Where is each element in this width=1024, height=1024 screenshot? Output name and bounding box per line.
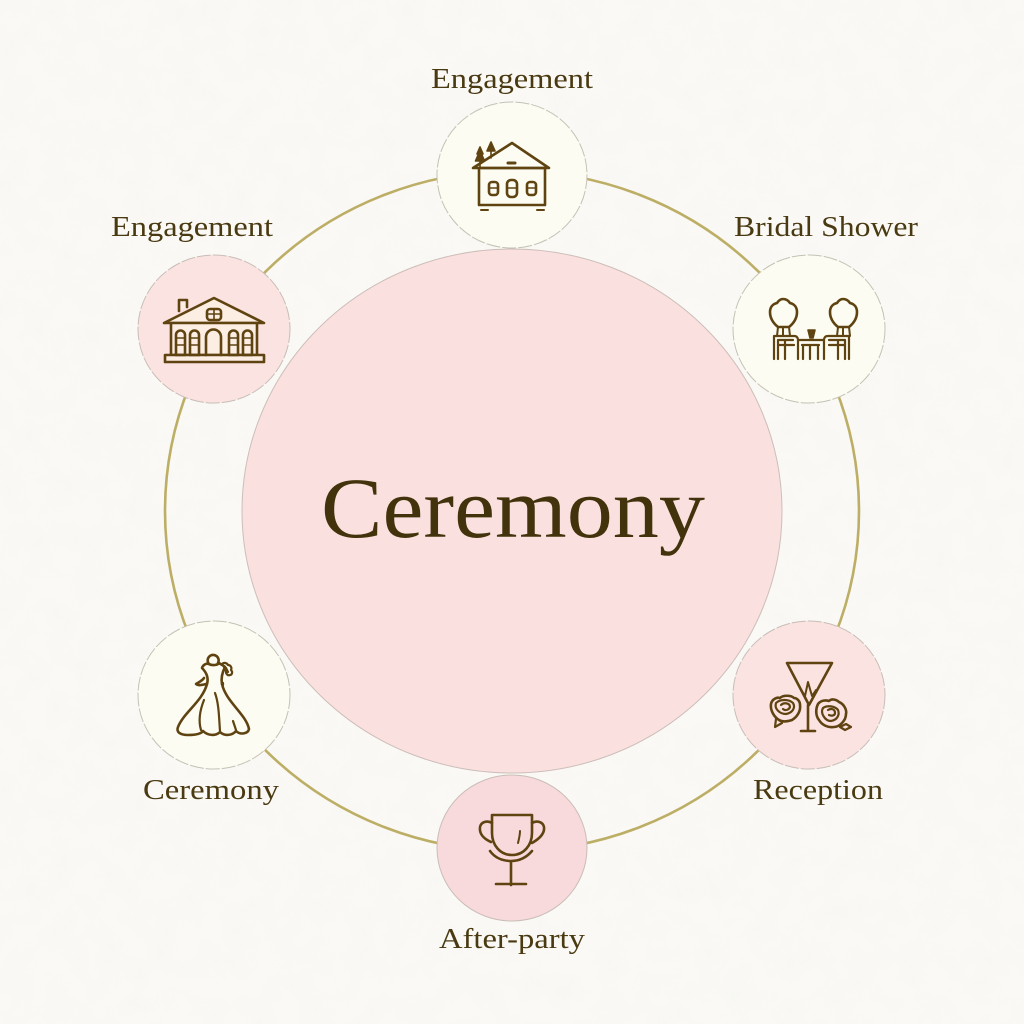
label: Ceremony: Ceremony [143,774,280,806]
stage: Reception [733,621,885,806]
stage: left Engagement [111,211,290,403]
icon: trophy [480,815,544,885]
stage: Ceremony [138,621,290,806]
label: Reception: Reception [753,774,884,806]
label: Bridal Shower: Bridal Shower [734,211,918,243]
node circle lower right [733,621,885,769]
central title: Ceremony [321,460,705,556]
stage: After-party [437,775,587,955]
node circle bottom [437,775,587,921]
stage: Bridal Shower [733,211,918,403]
node circle top [437,102,587,248]
label: Engagement top: Engagement [431,63,593,95]
icon: cottage with trees [473,142,549,210]
node circle upper left [138,255,290,403]
gold ring connecting the stages [165,171,859,851]
label: Engagement left: Engagement [111,211,273,243]
stage: top Engagement [431,63,593,248]
icon: wedding dress [177,655,249,735]
central circle [242,249,782,773]
label: After-party: After-party [439,923,586,955]
icon: chairs and table [770,299,857,359]
node circle upper right [733,255,885,403]
icon: glass and roses [771,663,851,731]
node circle lower left [138,621,290,769]
icon: villa [164,298,264,362]
